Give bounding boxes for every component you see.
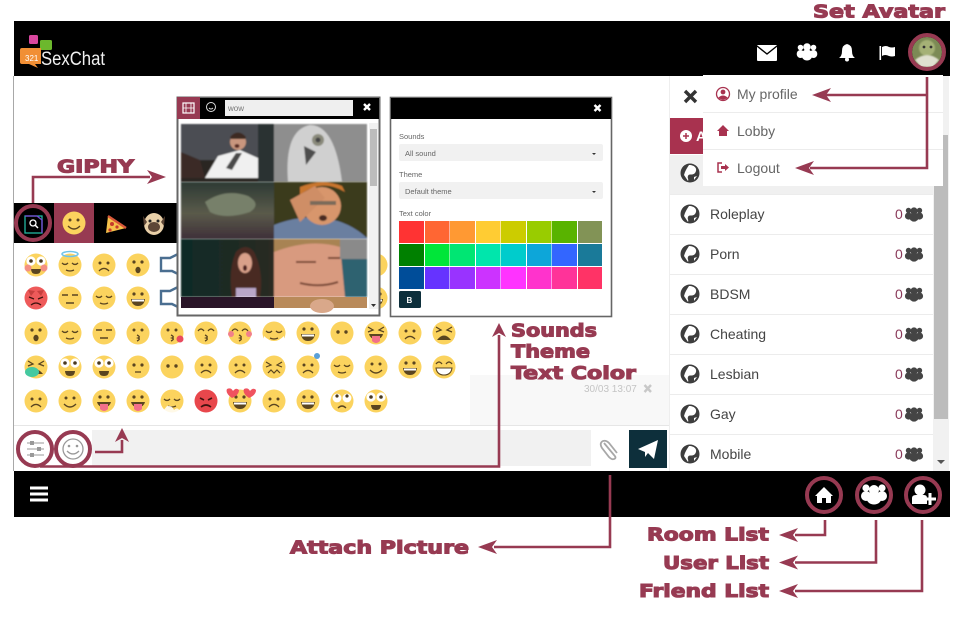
annotation: Friend List xyxy=(639,520,922,602)
send button xyxy=(629,430,667,468)
annotation: GIPHY xyxy=(33,156,166,203)
menu item: Lobby: Lobby xyxy=(737,123,775,139)
annotation: User List: User List xyxy=(663,553,769,574)
room: Porn: Porn xyxy=(710,246,740,262)
icon: bell xyxy=(839,44,855,62)
theme select: Theme xyxy=(399,170,422,179)
room: Porn: 0 xyxy=(895,246,903,262)
GIF picker panel xyxy=(177,97,380,316)
icon: giphy search xyxy=(16,206,50,240)
bottom bar xyxy=(14,471,950,517)
icon: paperclip xyxy=(601,441,617,459)
sounds select: Sounds xyxy=(399,132,425,141)
search box: wow xyxy=(227,104,244,113)
annotation: Sounds Theme Text Color: Text Color xyxy=(511,363,636,384)
icon: pizza tab xyxy=(106,216,126,233)
avatar xyxy=(910,35,944,69)
room: Lesbian: 0 xyxy=(895,366,903,382)
room: Gay: Gay xyxy=(710,406,736,422)
annotation: Attach Picture: Attach Picture xyxy=(290,538,469,558)
room: Mobile: 0 xyxy=(895,446,903,462)
icon: friend list xyxy=(906,478,940,512)
theme select: Default theme xyxy=(405,187,452,196)
logo: 321 xyxy=(25,54,39,63)
scrollbar xyxy=(933,76,949,471)
message timestamp: 30/03 13:07 xyxy=(584,384,637,395)
input bar xyxy=(14,425,670,468)
close icon xyxy=(594,105,600,111)
room: first xyxy=(680,164,700,182)
icon: smiley button xyxy=(56,432,90,466)
annotation: Sounds Theme Text Color xyxy=(40,320,636,466)
annotation: Set Avatar: Set Avatar xyxy=(813,2,945,22)
app frame xyxy=(13,21,950,517)
room: BDSM xyxy=(680,284,923,304)
menu item: Logout xyxy=(718,160,780,176)
annotation: Set Avatar xyxy=(795,2,945,175)
menu item: My profile: My profile xyxy=(737,86,798,102)
icon: users xyxy=(797,43,817,60)
bold button: B xyxy=(406,296,412,305)
room: Cheating: 0 xyxy=(895,326,903,342)
icon: menu xyxy=(30,488,48,500)
icon: pug tab xyxy=(143,213,165,235)
room: Cheating: Cheating xyxy=(710,326,766,342)
annotation: Room List xyxy=(647,520,825,546)
message area xyxy=(470,375,669,425)
add room button xyxy=(670,118,710,154)
room sidebar xyxy=(669,76,950,471)
annotation: GIPHY: GIPHY xyxy=(57,156,135,178)
sounds select xyxy=(399,132,603,161)
icon: user list xyxy=(857,478,891,512)
room: Mobile: Mobile xyxy=(710,446,751,462)
gif tab xyxy=(177,97,200,119)
icon: home xyxy=(807,478,841,512)
room: Lesbian xyxy=(680,364,923,384)
delete icon xyxy=(644,385,651,392)
color swatches xyxy=(399,221,602,289)
search box xyxy=(225,100,353,116)
annotation: emoji arrow xyxy=(95,428,129,452)
logo xyxy=(20,35,106,70)
text color label: Text color xyxy=(399,209,432,218)
gif thumbnails xyxy=(181,124,367,313)
icon: flag xyxy=(880,46,895,60)
theme select xyxy=(399,170,603,199)
room: BDSM: BDSM xyxy=(710,286,750,302)
annotation: User List xyxy=(663,520,876,574)
icon: mail xyxy=(757,45,777,61)
room: Gay xyxy=(680,404,923,424)
add room button: A xyxy=(696,128,706,144)
annotation: Sounds Theme Text Color: Sounds xyxy=(511,320,597,342)
emoji tab bar xyxy=(14,203,177,243)
room: Roleplay: Roleplay xyxy=(710,206,764,222)
logo: SexChat xyxy=(41,49,106,70)
top navigation bar xyxy=(14,21,950,76)
annotation: Friend List: Friend List xyxy=(639,581,769,602)
annotation: Room List: Room List xyxy=(647,524,769,546)
scrollbar xyxy=(369,123,378,309)
room: Roleplay xyxy=(680,204,923,224)
room: Gay: 0 xyxy=(895,406,903,422)
room: Cheating xyxy=(680,324,923,344)
room: Roleplay: 0 xyxy=(895,206,903,222)
room: BDSM: 0 xyxy=(895,286,903,302)
annotation: Attach Picture xyxy=(290,475,610,558)
room: Mobile xyxy=(680,444,923,464)
icon: smiley tab xyxy=(62,212,86,234)
sounds select: All sound xyxy=(405,149,436,158)
room: Lesbian: Lesbian xyxy=(710,366,759,382)
menu item: Logout: Logout xyxy=(737,160,780,176)
profile dropdown xyxy=(703,75,943,186)
room: Porn xyxy=(680,244,923,264)
icon: settings sliders xyxy=(18,432,52,466)
settings panel xyxy=(390,98,612,316)
annotation: Sounds Theme Text Color: Theme xyxy=(511,342,590,362)
menu item: Lobby xyxy=(717,123,775,139)
close icon xyxy=(364,104,370,110)
emoji tab xyxy=(206,102,216,112)
bold button xyxy=(399,291,421,308)
emoji grid xyxy=(24,252,456,414)
close icon xyxy=(685,91,696,102)
